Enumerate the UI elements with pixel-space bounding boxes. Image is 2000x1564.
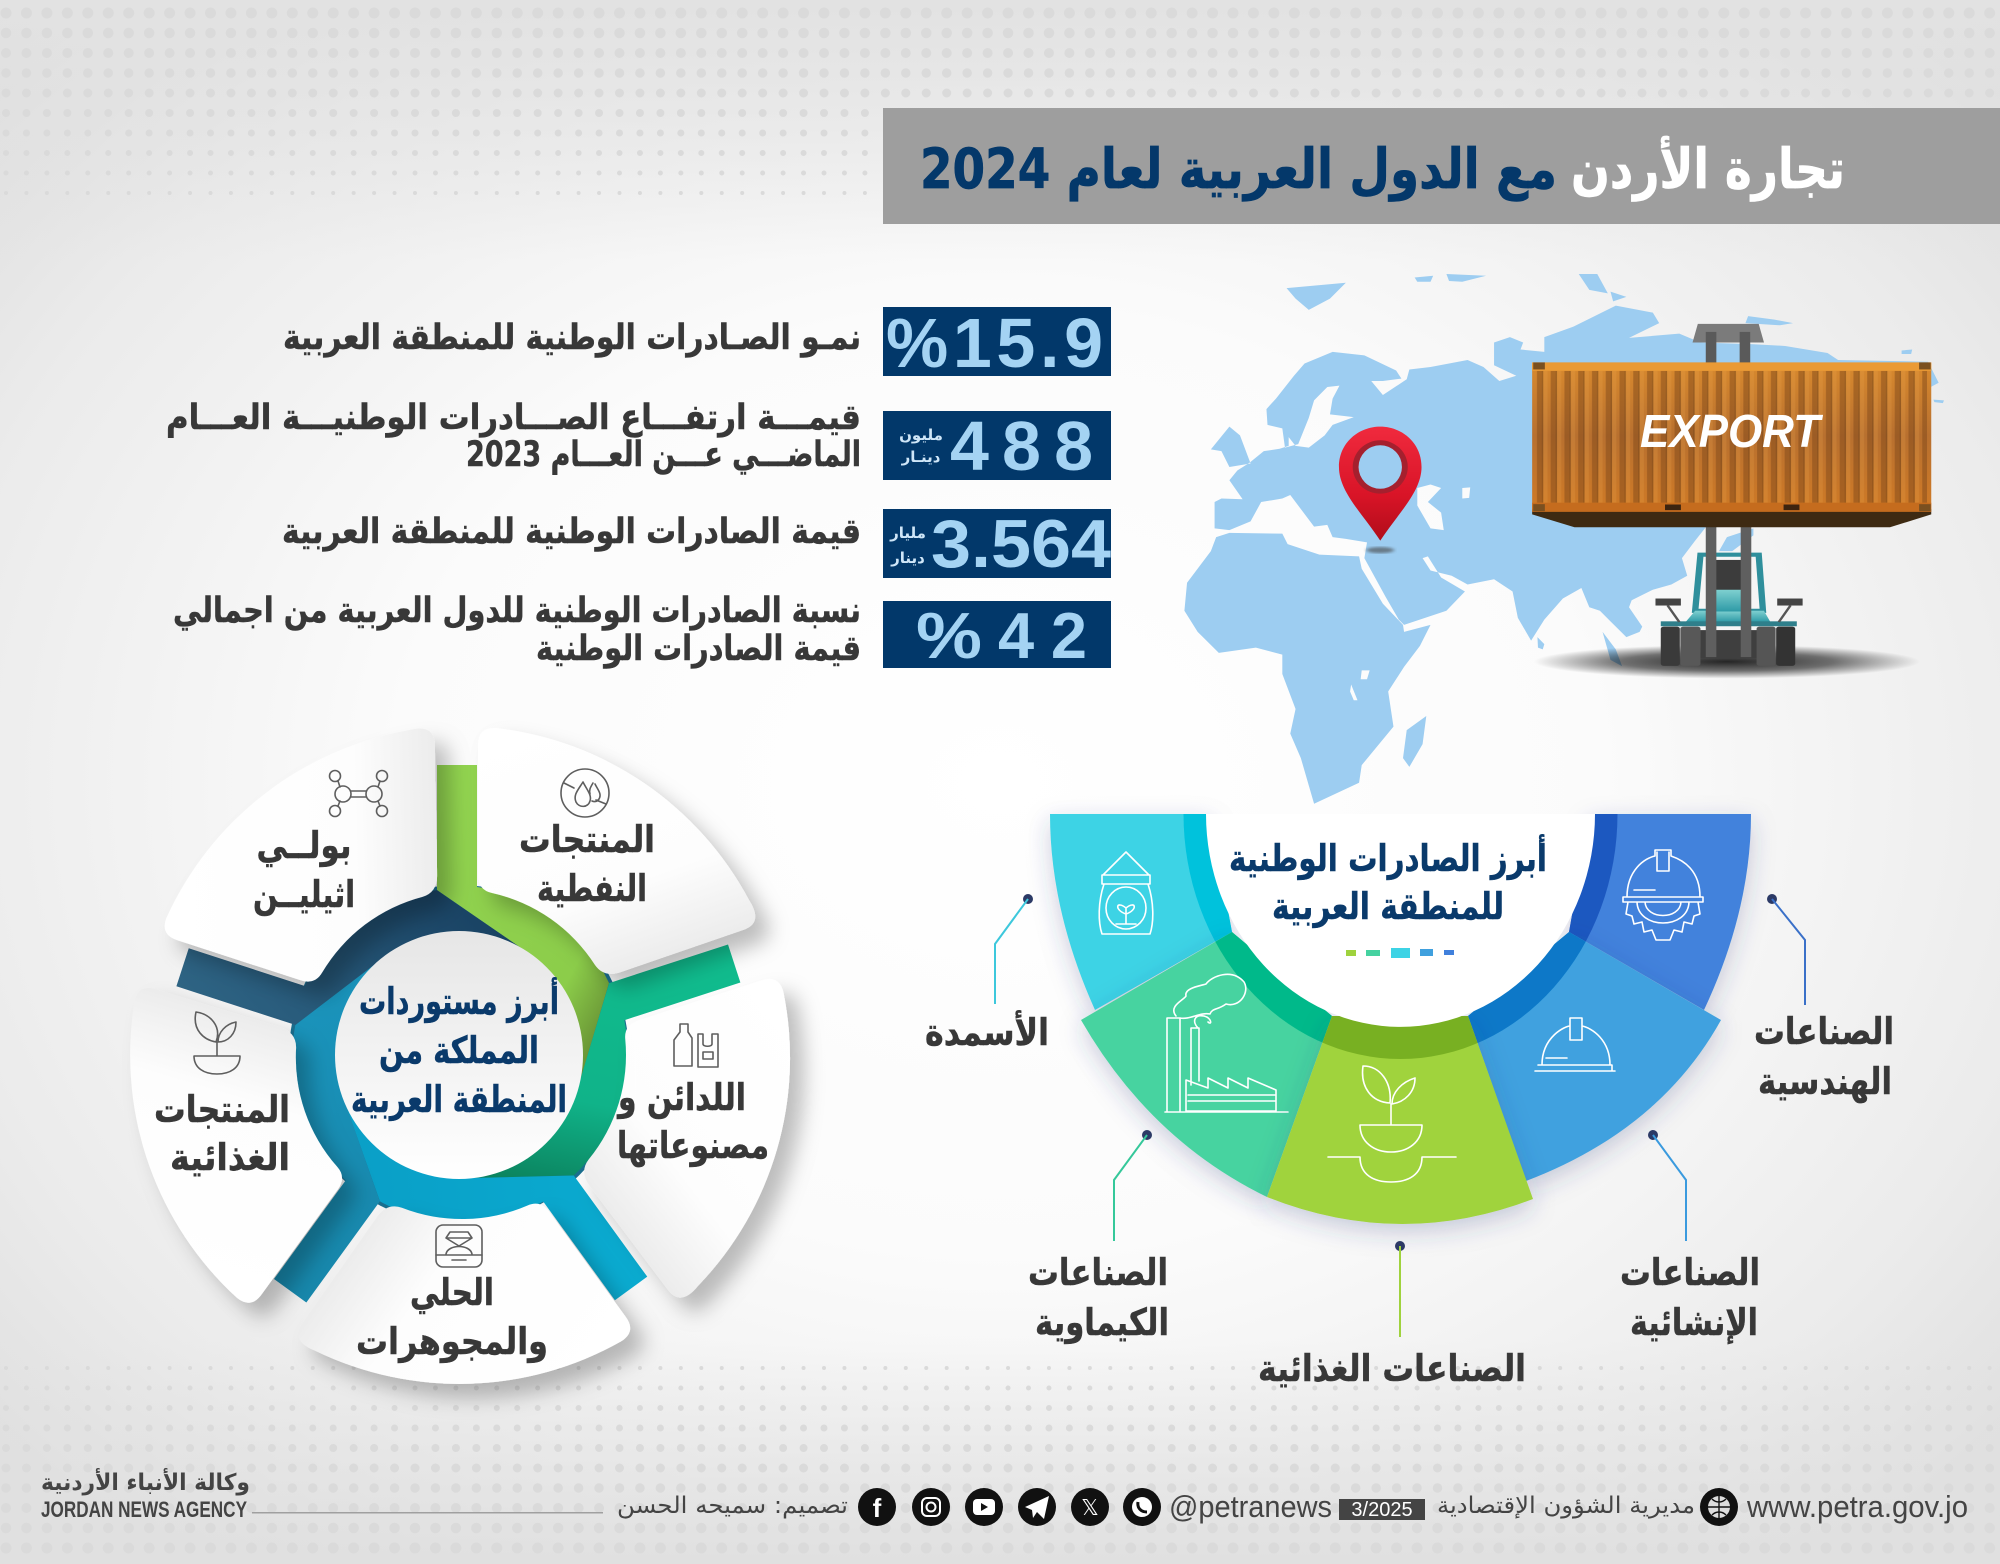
- icon: factory with smoke: [1165, 974, 1288, 1112]
- petal: oil products: النفطية: [537, 867, 647, 910]
- wheel centre: imports heading: المنطقة العربية: [351, 1078, 567, 1121]
- wheel centre: imports heading: أبرز مستوردات: [359, 977, 559, 1023]
- footer: handle and date: 3/2025: [1351, 1499, 1413, 1521]
- title banner: [883, 108, 2000, 224]
- label: food industries: [1258, 1241, 1526, 1390]
- icon: potted plant: [194, 1012, 240, 1074]
- stat: value 3.564 billion: دينار: [890, 549, 925, 567]
- petal: oil products: [478, 728, 755, 974]
- world map with pin: [1184, 274, 1944, 804]
- stat: rise 488 million: 488: [950, 407, 1093, 485]
- stat: growth 15.9%: نمـو الصـادرات الوطنية للمنطقة العربية: [283, 318, 861, 358]
- stat: share 42%: 42: [998, 599, 1087, 672]
- forklift with export container: EXPORT: [1640, 405, 1824, 457]
- stat: value 3.564 billion: [282, 506, 1111, 582]
- stat: value 3.564 billion: 3.564: [931, 506, 1111, 582]
- petal: polyethylene: [161, 671, 480, 1011]
- petal: jewellery: الحلي: [410, 1271, 494, 1314]
- exports fan: centre heading: [1206, 814, 1595, 1027]
- label: engineering industries: الصناعات: [1754, 1010, 1894, 1053]
- stat: share 42%: نسبة الصادرات الوطنية للدول العربية من اجمالي: [173, 591, 861, 631]
- label: chemical industries: [1028, 1130, 1169, 1344]
- icon: hard hat: [1535, 1018, 1615, 1071]
- exports fan: centre heading: للمنطقة العربية: [1272, 885, 1504, 928]
- footer: handle and date: [1169, 1489, 1425, 1524]
- petal: food products: المنتجات: [154, 1088, 290, 1131]
- label: engineering industries: [1754, 894, 1894, 1103]
- stat: share 42%: قيمة الصادرات الوطنية: [536, 629, 861, 669]
- stat: share 42%: %: [916, 599, 982, 672]
- label: chemical industries: الصناعات: [1028, 1251, 1168, 1294]
- label: fertilizers: [925, 894, 1049, 1054]
- petal: polyethylene: بولــي: [256, 824, 352, 867]
- forklift with export container: [1532, 324, 1931, 679]
- label: construction industries: [1620, 1130, 1760, 1344]
- icon: bottle and bag: [674, 1024, 718, 1067]
- label: construction industries: الإنشائية: [1630, 1301, 1758, 1344]
- imports wheel: coloured ring and bands: [167, 765, 781, 1378]
- petal: jewellery: [267, 1132, 636, 1494]
- stat: rise 488 million: الماضـــي عـــن العـــام 2023: [466, 435, 861, 475]
- footer: social icons: [858, 1488, 1161, 1526]
- icon: molecule: [330, 770, 388, 816]
- stat: value 3.564 billion: مليار: [889, 524, 926, 542]
- footer: designer credit: تصميم: سميحه الحسن: [617, 1493, 848, 1519]
- petal: oil products: المنتجات: [519, 818, 655, 861]
- stat: rise 488 million: قيمـــة ارتفـــاع الصـــادرات الوطنيـــة العـــام: [166, 398, 861, 438]
- stat: growth 15.9%: [283, 304, 1111, 382]
- footer: handle and date: @petranews: [1169, 1489, 1332, 1524]
- petal: plastics: مصنوعاتها: [617, 1124, 769, 1167]
- footer: agency logo text: وكالة الأنباء الأردنية: [41, 1467, 250, 1496]
- icon: fertilizer bag: [1099, 852, 1153, 934]
- petal: jewellery: والمجوهرات: [356, 1320, 548, 1363]
- petal: food products: الغذائية: [170, 1136, 290, 1179]
- label: chemical industries: الكيماوية: [1035, 1301, 1169, 1344]
- stat: rise 488 million: دينـار: [901, 448, 941, 466]
- exports fan: segment chemical: [1081, 932, 1332, 1197]
- label: construction industries: الصناعات: [1620, 1251, 1760, 1294]
- exports fan: segment engineering: [1569, 814, 1751, 1010]
- icon: helmet and gear: [1623, 850, 1703, 940]
- footer: agency logo text: [41, 1467, 603, 1522]
- petal: polyethylene: اثيليــن: [253, 873, 355, 916]
- petal: plastics: اللدائن و: [616, 1076, 746, 1119]
- footer: department: مديرية الشؤون الإقتصادية: [1437, 1493, 1695, 1519]
- petal: food products: [27, 946, 396, 1308]
- wheel centre: imports heading: المملكة من: [379, 1029, 539, 1072]
- footer: agency logo text: JORDAN NEWS AGENCY: [41, 1497, 247, 1522]
- label: food industries: الصناعات الغذائية: [1258, 1347, 1526, 1390]
- stat: rise 488 million: [166, 398, 1111, 485]
- exports fan: segment construction: [1468, 932, 1721, 1181]
- petal: plastics: [544, 975, 864, 1315]
- wheel centre: imports heading: [335, 931, 583, 1179]
- exports fan: segment food: [1267, 1016, 1533, 1224]
- stat: growth 15.9%: %15.9: [886, 304, 1103, 382]
- footer: social icons: f: [873, 1493, 882, 1523]
- icon: jewellery box: [436, 1225, 482, 1267]
- stat: rise 488 million: مليون: [899, 426, 943, 444]
- icon: seedling in soil: [1328, 1066, 1456, 1182]
- exports fan: segment fertilizers: [1050, 814, 1232, 1010]
- stat: share 42%: [173, 591, 1111, 672]
- label: fertilizers: الأسمدة: [925, 1009, 1049, 1054]
- exports fan: centre heading: أبرز الصادرات الوطنية: [1229, 834, 1547, 880]
- footer: social icons: 𝕏: [1081, 1495, 1099, 1520]
- title banner: مع الدول العربية لعام 2024: [920, 137, 1557, 202]
- stat: value 3.564 billion: قيمة الصادرات الوطنية للمنطقة العربية: [282, 512, 861, 552]
- title banner: تجارة الأردن: [1571, 136, 1845, 201]
- footer: website: www.petra.gov.jo: [1746, 1489, 1968, 1524]
- icon: oil drops: [561, 769, 609, 817]
- label: engineering industries: الهندسية: [1758, 1060, 1892, 1103]
